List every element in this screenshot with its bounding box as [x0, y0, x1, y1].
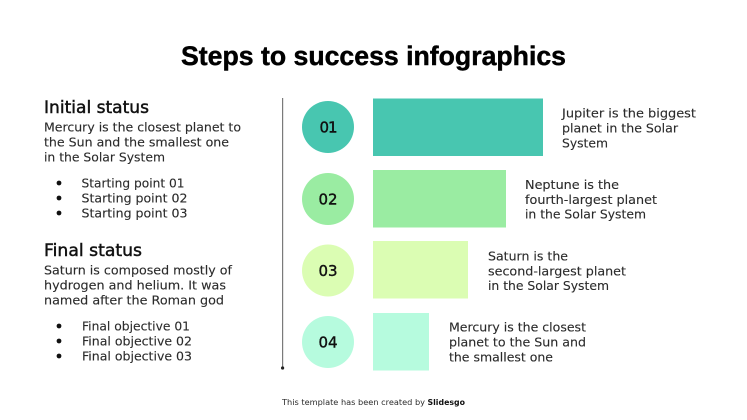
text block: Neptune: Neptune is the — [525, 177, 619, 192]
step 01 — [302, 98, 696, 156]
text block: Neptune: in the Solar System — [525, 206, 646, 222]
step 02 — [302, 170, 657, 228]
panel: initial status — [44, 98, 241, 220]
text block: Saturn — [488, 248, 626, 293]
text block: initial status description: in the Solar System — [44, 150, 165, 164]
text block: Saturn: in the Solar System — [488, 278, 609, 293]
text block: Mercury — [449, 320, 586, 364]
step 03 — [302, 241, 626, 298]
footer credit: This template has been created by — [281, 398, 425, 407]
list: final objectives: Final objective 01 — [82, 318, 190, 334]
list: final objectives: Final objective 03 — [82, 348, 192, 364]
list: final objectives: Final objective 02 — [82, 334, 192, 348]
title: Steps to success infographics — [181, 41, 566, 71]
bar 03 — [373, 241, 468, 298]
icon: circle 01: 01 — [319, 118, 337, 136]
text block: Jupiter: Jupiter is the biggest — [561, 106, 696, 120]
footer credit: Slidesgo — [428, 398, 465, 407]
panel: final status — [44, 241, 233, 364]
text block: Jupiter: planet in the Solar — [562, 120, 679, 136]
list: starting points: Starting point 02 — [82, 190, 188, 206]
text block: Jupiter — [561, 106, 696, 150]
text block: Mercury: Mercury is the closest — [449, 320, 586, 334]
text block: initial status description: the Sun and the smallest one — [44, 134, 229, 150]
text block: Saturn: second-largest planet — [488, 264, 626, 278]
text block: final status description — [44, 262, 233, 308]
text block: Jupiter: System — [562, 136, 608, 150]
heading: initial status: Initial status — [44, 98, 149, 117]
icon: circle 01 — [302, 101, 354, 153]
text block: initial status description: Mercury is the closest planet to — [44, 120, 241, 134]
text block: final status description: Saturn is composed mostly of — [44, 262, 233, 278]
arrow: vertical timeline — [281, 98, 284, 370]
step 04 — [302, 313, 586, 370]
icon: circle 02: 02 — [318, 190, 338, 208]
text block: final status description: named after the Roman god — [44, 292, 224, 308]
text block: final status description: hydrogen and helium. It was — [44, 278, 226, 292]
list: starting points: Starting point 03 — [82, 206, 188, 220]
text block: Neptune — [525, 177, 657, 222]
bar 01 — [373, 98, 543, 156]
list: starting points: Starting point 01 — [82, 176, 184, 190]
text block: initial status description — [44, 120, 241, 164]
icon: circle 02 — [302, 173, 354, 225]
heading: final status: Final status — [44, 241, 142, 260]
icon: circle 03 — [302, 244, 354, 296]
icon: circle 03: 03 — [318, 262, 338, 280]
text block: Neptune: fourth-largest planet — [525, 192, 657, 207]
icon: circle 04 — [302, 316, 354, 368]
list: final objectives — [57, 318, 192, 364]
icon: circle 04: 04 — [318, 334, 338, 352]
bar 04 — [373, 313, 429, 370]
bar 02 — [373, 170, 506, 228]
list: starting points — [57, 176, 187, 220]
text block: Mercury: planet to the Sun and — [449, 334, 586, 350]
text block: Saturn: Saturn is the — [488, 248, 568, 264]
text block: Mercury: the smallest one — [449, 350, 553, 364]
